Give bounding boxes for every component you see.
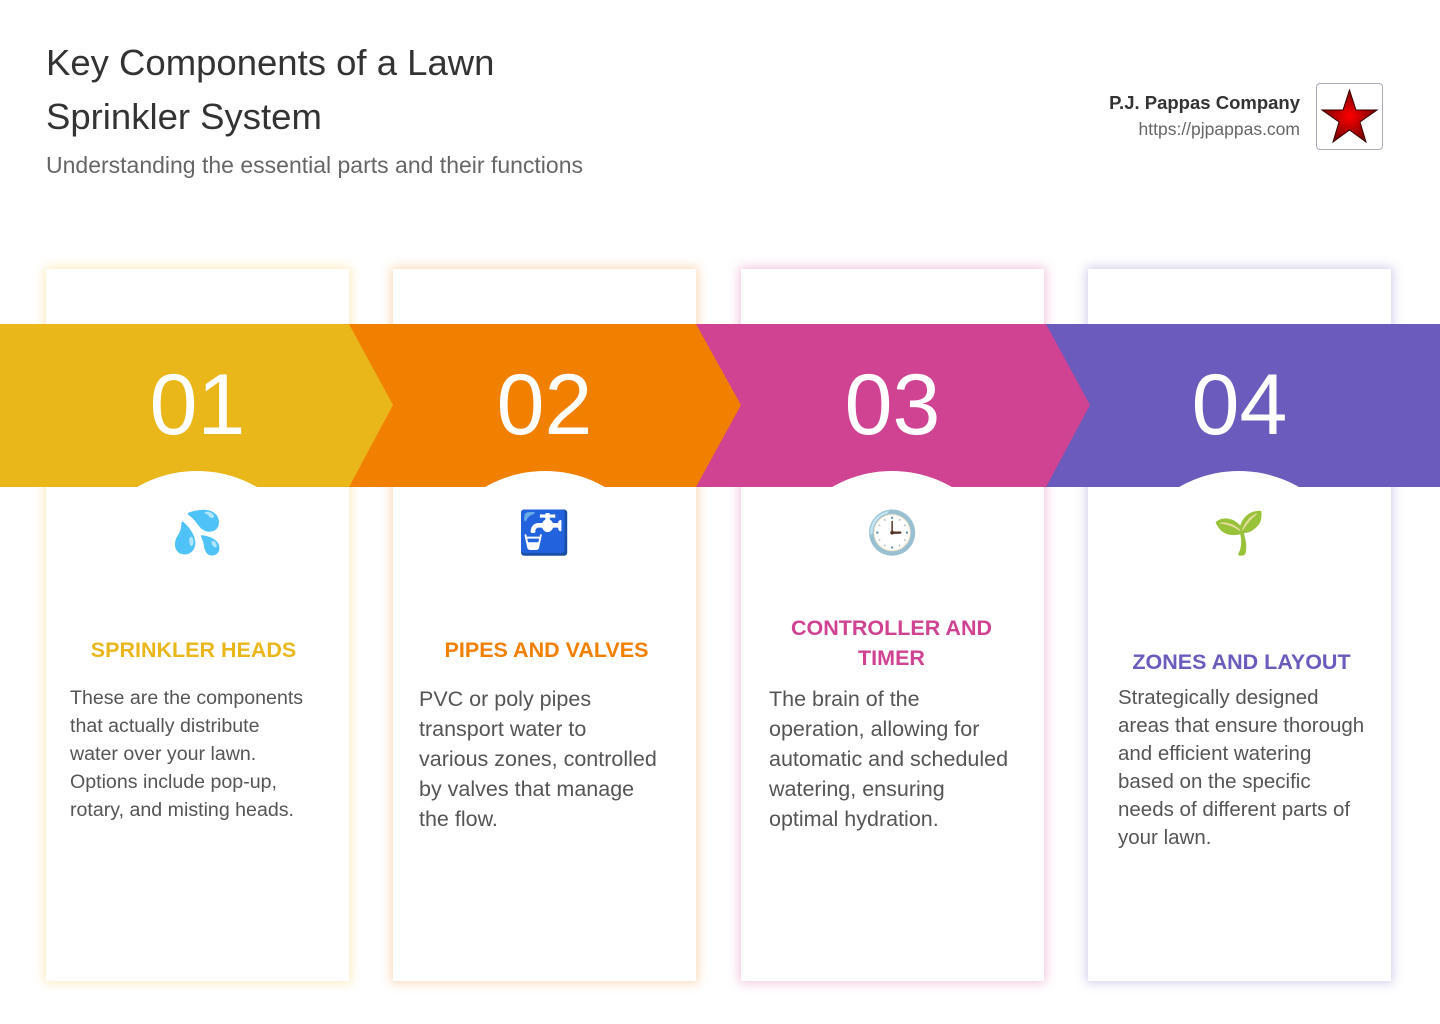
text: 03 [845, 357, 940, 453]
texts: that actually distribute [70, 715, 260, 737]
numbers: 01 [150, 357, 245, 453]
texts: rotary, and misting heads. [70, 799, 294, 821]
texts [70, 687, 303, 821]
title: Key Components of a Lawn [46, 42, 494, 83]
text: watering, ensuring [769, 777, 945, 801]
text: based on the specific [1118, 770, 1311, 793]
text: 🕒 [866, 508, 919, 557]
title: Sprinkler System [46, 96, 322, 137]
card 2 [393, 269, 696, 981]
text: The brain of the [769, 687, 920, 711]
text: ZONES AND LAYOUT [1132, 650, 1351, 674]
texts: water over your lawn. [70, 743, 256, 765]
text: and efficient watering [1118, 742, 1311, 765]
text: PVC or poly pipes [419, 687, 591, 711]
text: needs of different parts of [1118, 798, 1350, 821]
text: operation, allowing for [769, 717, 979, 741]
text: your lawn. [1118, 826, 1211, 849]
text: 🌱 [1213, 508, 1266, 557]
icons: 💦 [171, 508, 224, 557]
card 3 [741, 269, 1044, 981]
text: the flow. [419, 807, 498, 831]
text: various zones, controlled [419, 747, 657, 771]
text: automatic and scheduled [769, 747, 1008, 771]
text: TIMER [858, 646, 925, 670]
text: PIPES AND VALVES [445, 638, 648, 662]
card 1 [46, 269, 349, 981]
card 4 [1088, 269, 1391, 981]
title [46, 42, 494, 137]
company [1109, 92, 1300, 139]
text: areas that ensure thorough [1118, 714, 1364, 737]
texts: These are the components [70, 687, 303, 709]
company: P.J. Pappas Company [1109, 92, 1300, 113]
subtitle: Understanding the essential parts and their functions [46, 152, 583, 178]
text: transport water to [419, 717, 586, 741]
headings: SPRINKLER HEADS [91, 638, 296, 662]
text: optimal hydration. [769, 807, 939, 831]
text: 04 [1192, 357, 1287, 453]
texts: Options include pop-up, [70, 771, 277, 793]
text: CONTROLLER AND [791, 616, 992, 640]
text: 🚰 [518, 508, 571, 557]
text: 02 [497, 357, 592, 453]
company: https://pjpappas.com [1139, 119, 1300, 139]
text: Strategically designed [1118, 686, 1319, 709]
text: by valves that manage [419, 777, 634, 801]
logo [1316, 83, 1383, 150]
